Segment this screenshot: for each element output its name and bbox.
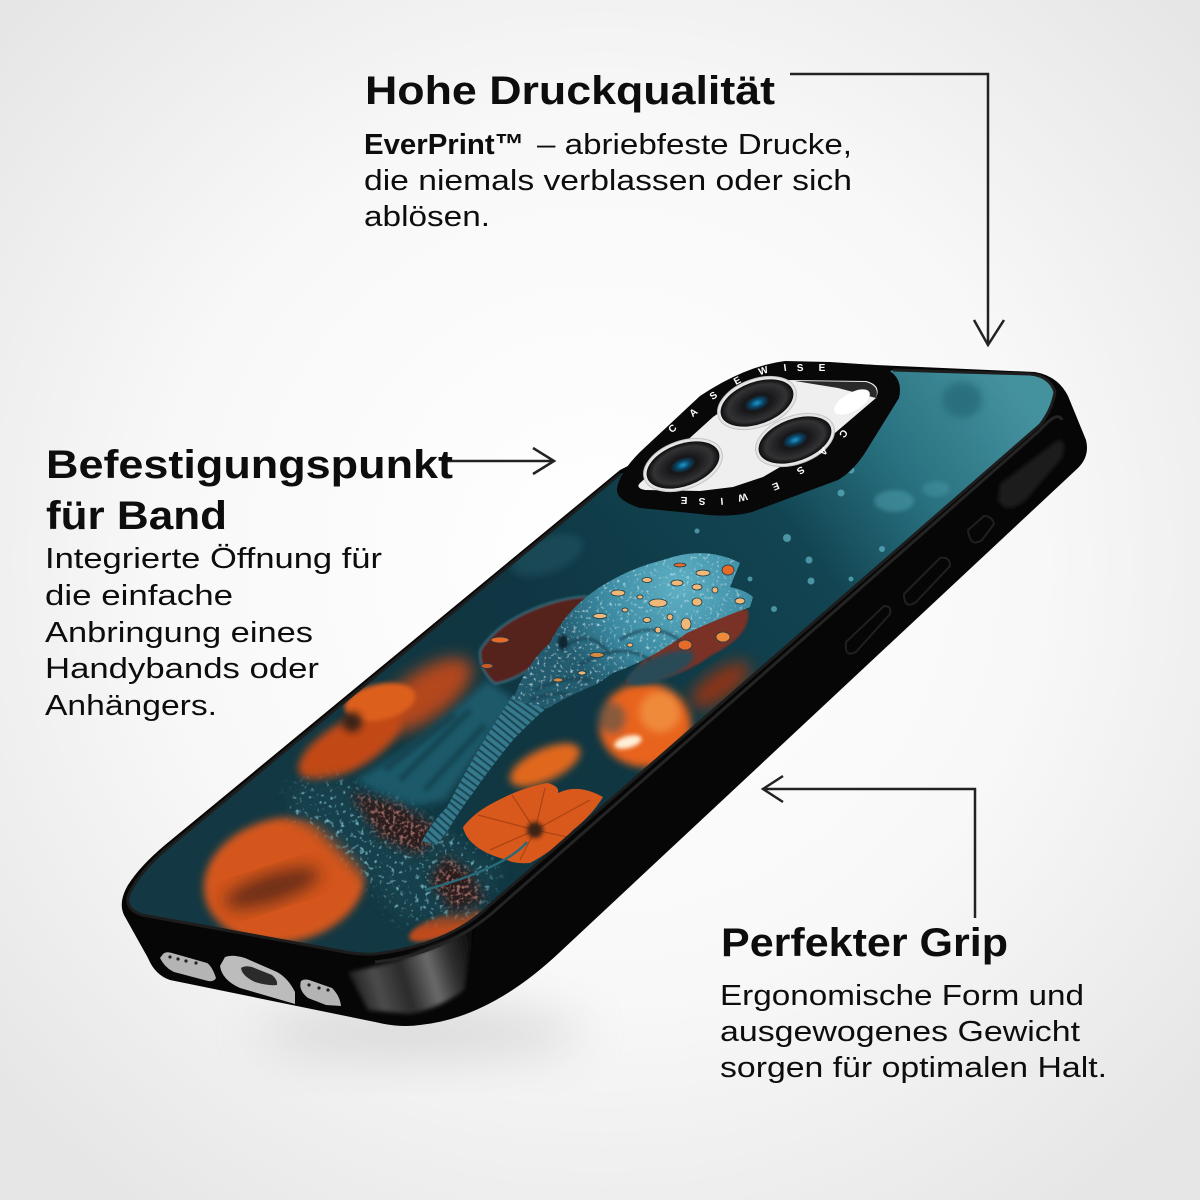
side buttons <box>846 516 994 654</box>
frame lettering: S <box>708 390 720 403</box>
phone case <box>100 350 1100 1026</box>
lens right <box>748 403 842 477</box>
case body <box>122 363 1087 1026</box>
body: print quality <box>364 129 852 233</box>
frame lettering: A <box>688 407 700 420</box>
wet ground <box>290 780 500 920</box>
glow right of trunk <box>598 683 691 767</box>
frame lettering: S <box>796 363 804 374</box>
heading: strap attachment: für Band <box>46 494 227 538</box>
heading: strap attachment: Befestigungspunkt <box>46 443 453 487</box>
body: print quality: ablösen. <box>364 201 490 233</box>
glare droplet <box>613 733 643 751</box>
heading: grip: Perfekter Grip <box>721 921 1008 965</box>
screen image <box>129 370 1054 953</box>
corner highlight <box>348 927 473 1014</box>
camera frame <box>617 361 900 516</box>
body: strap attachment <box>45 543 382 722</box>
body: print quality: – abriebfeste Drucke, <box>537 129 852 161</box>
frame lettering: I <box>783 363 788 374</box>
frame lettering: A <box>816 445 829 457</box>
blurred orange flower upper left <box>292 646 484 785</box>
arrow: grip <box>763 776 975 918</box>
frame lettering: C <box>667 423 679 436</box>
body: strap attachment: Anbringung eines <box>45 617 313 649</box>
frame lettering: C <box>836 427 849 439</box>
dark top smudge <box>942 382 982 418</box>
phone shadow <box>255 1008 585 1056</box>
frame lettering: E <box>680 494 688 505</box>
second glow <box>504 737 586 792</box>
blurred bubbles <box>505 466 950 612</box>
body: grip <box>720 980 1107 1084</box>
elephant <box>410 553 753 855</box>
lens left <box>636 428 730 502</box>
text block: print quality <box>364 69 852 233</box>
frame lettering: W <box>757 365 770 378</box>
body: strap attachment: die einfache <box>45 580 233 612</box>
eye <box>558 635 568 649</box>
frame lettering: W <box>736 490 748 503</box>
camera well <box>638 380 878 491</box>
body: print quality: die niemals verblassen oder sich <box>364 165 852 197</box>
elephant body blur <box>355 680 515 810</box>
frame lettering: I <box>720 495 724 506</box>
heading: strap attachment <box>46 443 453 538</box>
frame lettering <box>667 363 849 506</box>
body: strap attachment: Anhängers. <box>45 690 217 722</box>
frame lettering: S <box>794 463 806 476</box>
frame lettering: S <box>698 495 705 506</box>
frame lettering: E <box>819 363 826 374</box>
body: grip: sorgen für optimalen Halt. <box>720 1052 1107 1084</box>
arrow: strap attachment <box>445 448 554 474</box>
text block: grip <box>720 921 1107 1084</box>
frame lettering: E <box>770 479 781 492</box>
charging port <box>220 956 295 1004</box>
camera island <box>617 361 900 516</box>
bottom ports <box>160 952 341 1006</box>
head <box>513 553 753 708</box>
water drops <box>481 563 745 682</box>
body: grip: ausgewogenes Gewicht <box>720 1016 1080 1048</box>
sharp orange flower <box>425 783 603 890</box>
ear left <box>480 596 600 684</box>
ear right <box>625 605 748 682</box>
heading: print quality: Hohe Druckqualität <box>365 69 775 113</box>
lens top <box>710 366 804 440</box>
body: print quality: EverPrint™ <box>364 129 524 161</box>
left speaker <box>160 952 216 981</box>
body: strap attachment: Integrierte Öffnung für <box>45 543 382 575</box>
body: grip: Ergonomische Form und <box>720 980 1084 1012</box>
body: strap attachment: Handybands oder <box>45 653 319 685</box>
trunk <box>422 695 547 845</box>
side rim <box>375 417 1062 962</box>
side bump <box>998 440 1064 508</box>
arrow: print quality <box>790 74 1004 345</box>
screen edge <box>128 370 1055 954</box>
frame lettering: E <box>732 375 744 388</box>
right speaker <box>300 980 341 1006</box>
blurred orange flower lower left <box>198 812 370 944</box>
head creases <box>530 630 680 700</box>
text block: strap attachment <box>45 443 453 722</box>
